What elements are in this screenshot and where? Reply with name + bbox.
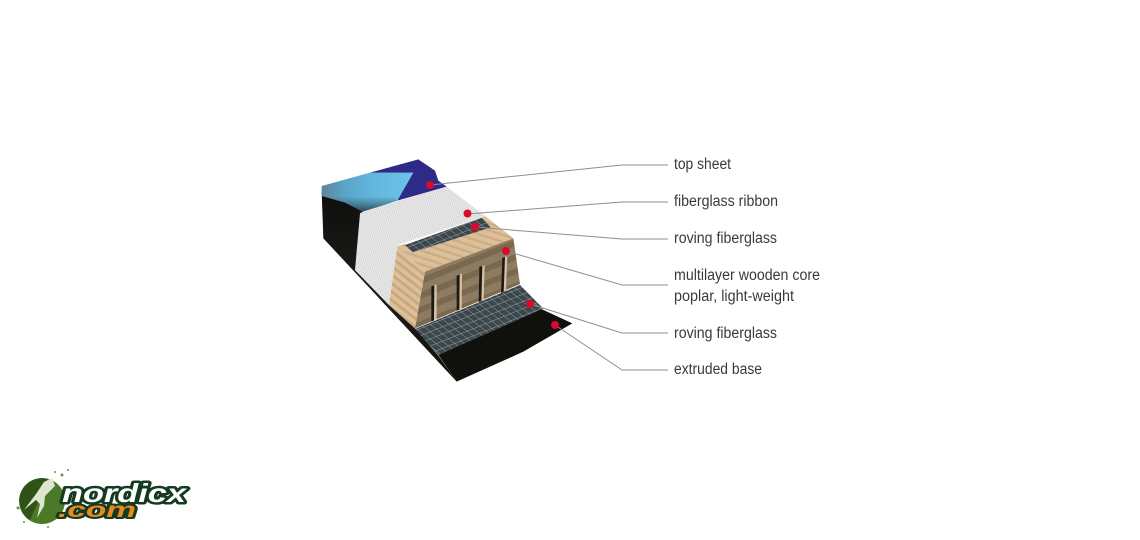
extruded base [438, 308, 572, 382]
lower roving fiberglass [415, 285, 543, 355]
fiberglass ribbon [355, 187, 485, 305]
black sidewall [322, 192, 457, 382]
wood top face [397, 216, 513, 272]
wood front face [415, 238, 520, 328]
top sheet shading [322, 173, 397, 212]
upper roving fiberglass [405, 218, 491, 252]
label: extruded base: extruded base [674, 361, 762, 378]
label: poplar, light-weight: poplar, light-weight [674, 288, 795, 305]
leader lines [430, 165, 668, 370]
label: roving fiberglass lower: roving fiberglass [674, 325, 777, 342]
logo text: .com: .com [58, 499, 136, 522]
label: top sheet: top sheet [674, 156, 732, 173]
label: multilayer wooden core: multilayer wooden core [674, 267, 820, 284]
labels [674, 156, 820, 378]
core slots [431, 256, 507, 321]
wooden core [389, 216, 520, 328]
logo globe with skier [16, 469, 69, 528]
top sheet dark blue [370, 159, 447, 201]
label: roving fiberglass: roving fiberglass [674, 230, 777, 247]
logo: nordicx.com [16, 469, 188, 528]
red marker dots [426, 181, 559, 329]
label: fiberglass ribbon: fiberglass ribbon [674, 193, 778, 210]
logo text: nordicx: nordicx [62, 478, 188, 508]
wood left face [389, 246, 425, 328]
top sheet light blue [322, 173, 413, 212]
ski cross-section diagram [322, 159, 572, 382]
